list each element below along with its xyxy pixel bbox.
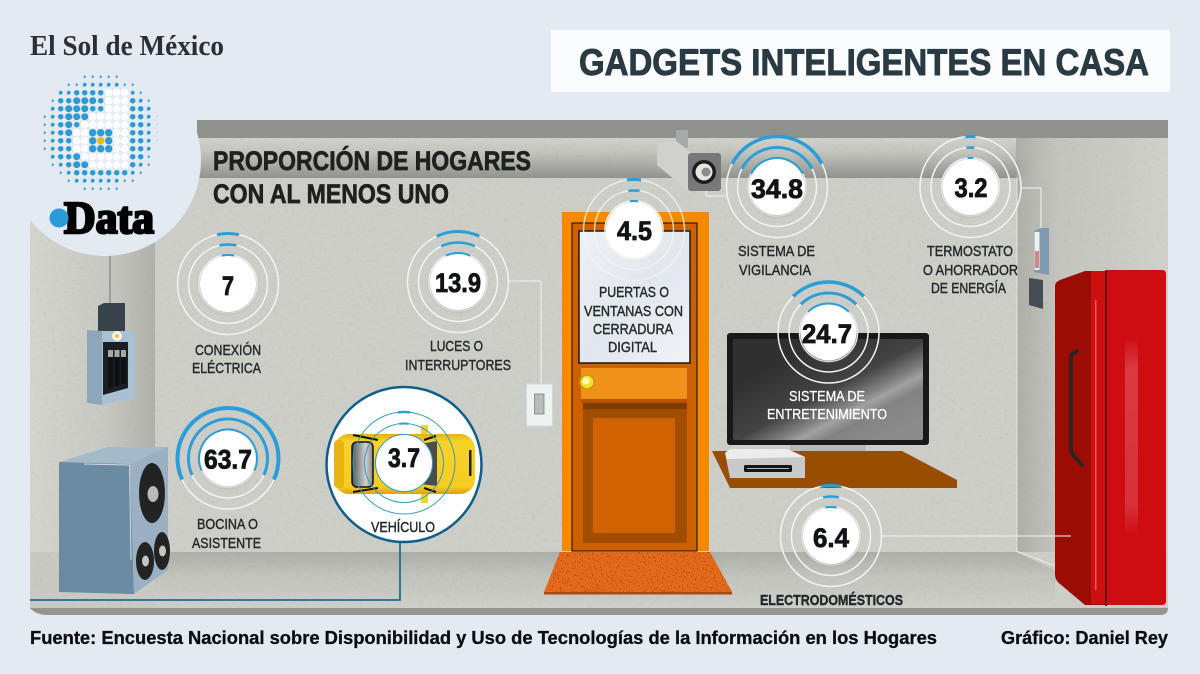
heading [213, 145, 531, 209]
ring metric: puertas o ventanas 4.5 [577, 173, 691, 356]
ring metric: termostato 3.2: DE ENERGÍA [931, 280, 1006, 297]
ring metric: conexión eléctrica 7: CONEXIÓN [195, 342, 261, 359]
ring metric: sistema de vigilancia 34.8: 34.8 [751, 174, 803, 204]
icon: light switch [509, 281, 552, 426]
ring metric: termostato 3.2: O AHORRADOR [923, 263, 1018, 279]
ring metric: conexión eléctrica 7: ELÉCTRICA [192, 360, 261, 377]
ring metric: conexión eléctrica 7: 7 [222, 271, 234, 301]
ring metric: bocina o asistente 63.7 [161, 392, 295, 552]
ring metric: sistema de vigilancia 34.8 [709, 119, 845, 279]
ring metric: puertas o ventanas 4.5: DIGITAL [608, 340, 657, 356]
ring metric: bocina o asistente 63.7: ASISTENTE [192, 536, 261, 552]
ring metric: luces o interruptores 13.9: INTERRUPTORES [405, 358, 511, 374]
ring metric: conexión eléctrica 7 [168, 224, 288, 377]
ring metric: luces o interruptores 13.9: 13.9 [435, 268, 481, 298]
icon: door [562, 212, 709, 551]
ring metric: sistema de entretenimiento 24.7: SISTEMA DE [789, 389, 865, 405]
ring metric: luces o interruptores 13.9 [391, 215, 525, 374]
credit: Gráfico: Daniel Rey [1001, 628, 1168, 648]
ring metric: puertas o ventanas 4.5: CERRADURA [593, 322, 673, 338]
ring metric: termostato 3.2: TERMOSTATO [927, 244, 1013, 260]
logo: El Sol de México: El Sol de México [30, 30, 224, 62]
logo background circle [9, 64, 201, 256]
icon: thermostat [1021, 188, 1049, 309]
logo: Data dot emblem [45, 77, 157, 189]
logo: Data wordmark: Data [64, 192, 154, 243]
label: vehículo: VEHÍCULO [371, 519, 435, 536]
ring metric: sistema de entretenimiento 24.7 [757, 261, 900, 423]
value: vehículo: 3.7 [388, 443, 420, 473]
ring metric: puertas o ventanas 4.5: VENTANAS CON [584, 304, 683, 320]
icon: TV table with console [712, 449, 957, 488]
icon: electrical panel [87, 256, 135, 405]
ring metric: sistema de entretenimiento 24.7: 24.7 [802, 319, 852, 349]
connector: vehicle [30, 540, 400, 600]
ring metric: termostato 3.2 [915, 132, 1026, 297]
ring metric: puertas o ventanas 4.5: 4.5 [617, 216, 652, 246]
heading: CON AL MENOS UNO [213, 179, 449, 209]
icon: speaker [59, 447, 170, 594]
icon: yellow car [334, 425, 475, 503]
title box [551, 30, 1170, 92]
heading: PROPORCIÓN DE HOGARES [213, 145, 531, 176]
icon: doormat [544, 552, 732, 594]
icon: red refrigerator [1055, 270, 1166, 606]
ring metric: bocina o asistente 63.7: 63.7 [204, 444, 252, 474]
ring metric: electrodomésticos 6.4: 6.4 [813, 523, 849, 553]
title box: GADGETS INTELIGENTES EN CASA [579, 42, 1149, 83]
icon: security camera [657, 130, 726, 196]
ring metric: sistema de entretenimiento 24.7: ENTRETENIMIENTO [767, 407, 887, 423]
ring metric: electrodomésticos 6.4: ELECTRODOMÉSTICOS [760, 592, 903, 609]
panel: room illustration [30, 120, 1168, 615]
ring metric: puertas o ventanas 4.5: PUERTAS O [599, 285, 669, 301]
ring metric: sistema de vigilancia 34.8: VIGILANCIA [739, 263, 811, 279]
ring metric: luces o interruptores 13.9: LUCES O [430, 339, 483, 355]
ring metric: electrodomésticos 6.4 [760, 476, 1071, 609]
ring metric: bocina o asistente 63.7: BOCINA O [197, 517, 258, 533]
ring metric: sistema de vigilancia 34.8: SISTEMA DE [738, 244, 815, 260]
icon: television [727, 333, 929, 451]
panel: vehicle circle [326, 387, 482, 542]
ring metric: termostato 3.2: 3.2 [954, 173, 988, 203]
source note: Fuente: Encuesta Nacional sobre Disponibilidad y Uso de Tecnologías de la Información en los Hogares [30, 628, 937, 648]
